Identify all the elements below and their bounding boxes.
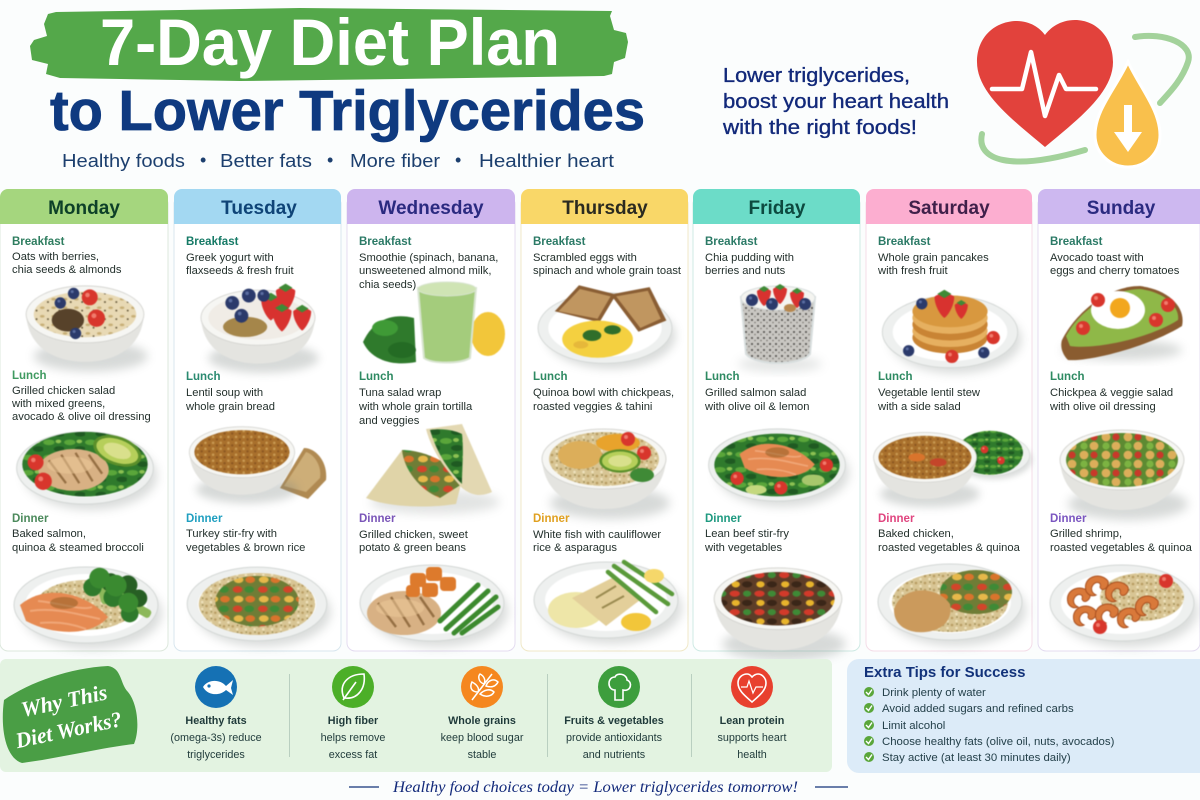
label: Whole grains (448, 715, 516, 727)
card (347, 196, 515, 651)
footer slogan: Healthy food choices today = Lower triglycerides tomorrow! (392, 779, 798, 796)
dinner text: potato & green beans (359, 542, 466, 554)
down arrow (1114, 105, 1142, 152)
icon: heart (731, 666, 773, 708)
pulse line (992, 52, 1096, 116)
panel: Saturday (866, 189, 1032, 651)
card (174, 196, 341, 651)
tagline (62, 150, 614, 171)
panel background (847, 659, 1200, 773)
lunch text: with mixed greens, (11, 398, 105, 410)
lunch text: with a side salad (877, 401, 961, 413)
lunch text: Lunch (12, 370, 46, 382)
tagline: • (455, 150, 461, 170)
benefit: whole grains (441, 666, 524, 761)
breakfast text: Breakfast (186, 236, 239, 248)
panel: extra tips (847, 659, 1200, 773)
dinner text: Dinner (359, 513, 396, 525)
tip: sugars: Avoid added sugars and refined carbs (882, 703, 1074, 715)
dish: turkey stir-fry (187, 567, 331, 647)
icon: leaf (332, 666, 374, 708)
benefit: lean protein (717, 666, 787, 761)
breakfast text: spinach and whole grain toast (533, 265, 682, 277)
dish: pancakes (882, 290, 1021, 373)
slogan: with the right foods! (722, 117, 917, 139)
benefit: high fiber (321, 666, 385, 761)
dinner text: Dinner (1050, 513, 1087, 525)
day name: Tuesday (221, 198, 297, 219)
panel background (0, 659, 832, 772)
breakfast text: Breakfast (12, 236, 65, 248)
tagline: Healthy foods (62, 151, 185, 171)
panel: why this diet works (0, 659, 832, 772)
breakfast text: Avocado toast with (1050, 252, 1144, 264)
breakfast text: Oats with berries, (12, 251, 99, 263)
dish: chicken sweet potato (360, 565, 508, 647)
dish: grilled shrimp (1050, 565, 1198, 647)
tagline: • (327, 150, 333, 170)
day name: Friday (748, 198, 806, 219)
card (1038, 196, 1200, 651)
lunch text: whole grain bread (185, 401, 275, 413)
dish: quinoa bowl (542, 429, 670, 519)
lunch text: Lunch (186, 371, 220, 383)
tip: active: Stay active (at least 30 minutes daily) (882, 752, 1071, 764)
icon: fish (195, 666, 237, 708)
lunch text: Lunch (878, 371, 912, 383)
panel: Tuesday (174, 189, 341, 651)
header (1038, 189, 1200, 224)
day name: Saturday (908, 198, 990, 219)
dinner text: Lean beef stir-fry (705, 528, 789, 540)
dinner text: roasted vegetables & quinoa (1050, 542, 1193, 554)
lunch text: Grilled chicken salad (12, 385, 115, 397)
label: keep blood sugar (441, 732, 524, 744)
card (521, 196, 688, 651)
dinner text: rice & asparagus (533, 542, 617, 554)
panel: Friday (693, 189, 860, 661)
green swoosh (981, 36, 1189, 161)
dinner text: Baked salmon, (12, 528, 86, 540)
label: supports heart (717, 732, 787, 744)
slogan: boost your heart health (723, 91, 949, 113)
lunch text: Lentil soup with (186, 387, 263, 399)
header (866, 189, 1032, 224)
dinner text: quinoa & steamed broccoli (12, 542, 144, 554)
panel: Sunday (1038, 189, 1200, 651)
panel: Monday (0, 189, 168, 651)
dinner text: White fish with cauliflower (533, 529, 661, 541)
tagline: Better fats (220, 151, 312, 171)
breakfast text: berries and nuts (705, 265, 786, 277)
breakfast text: chia seeds) (359, 279, 416, 291)
tip: fats: Choose healthy fats (olive oil, nuts, avocados) (882, 736, 1115, 748)
dinner text: Turkey stir-fry with (186, 528, 277, 540)
label: excess fat (329, 749, 377, 761)
dinner text: Dinner (12, 513, 49, 525)
dish: lentil stew and salad (874, 431, 1032, 507)
header (347, 189, 515, 224)
dish: avocado toast (1061, 286, 1183, 360)
lunch text: roasted veggies & tahini (533, 401, 652, 413)
dinner text: Dinner (705, 513, 742, 525)
lunch text: Chickpea & veggie salad (1050, 387, 1173, 399)
header (0, 189, 168, 224)
header (521, 189, 688, 224)
title block (30, 5, 645, 171)
lunch text: Lunch (705, 371, 740, 383)
label: Healthy fats (185, 715, 247, 727)
badge: Why This (19, 679, 109, 722)
lunch text: Grilled salmon salad (705, 387, 806, 399)
dish: eggs and toast (538, 285, 676, 369)
label: Lean protein (720, 715, 784, 727)
lunch text: Lunch (1050, 371, 1084, 383)
dish: chickpea salad (1060, 430, 1188, 520)
breakfast text: with fresh fruit (877, 265, 949, 277)
benefit: healthy fats (170, 666, 262, 761)
dinner text: with vegetables (704, 542, 783, 554)
dinner text: Dinner (533, 513, 570, 525)
header (174, 189, 341, 224)
label: triglycerides (187, 749, 245, 761)
dish: yogurt bowl (201, 284, 319, 373)
breakfast text: Whole grain pancakes (878, 252, 989, 264)
label: Fruits & vegetables (564, 715, 664, 727)
badge: Diet Works? (12, 706, 124, 753)
dinner text: Dinner (878, 513, 915, 525)
card (693, 196, 860, 651)
breakfast text: Breakfast (359, 236, 412, 248)
icon: grain (461, 666, 503, 708)
dish: green smoothie (363, 282, 505, 363)
lunch text: Lunch (359, 371, 394, 383)
breakfast text: unsweetened almond milk, (359, 265, 491, 277)
breakfast text: Breakfast (705, 236, 758, 248)
breakfast text: Smoothie (spinach, banana, (359, 252, 498, 264)
breakfast text: Greek yogurt with (186, 252, 274, 264)
tagline: More fiber (350, 151, 440, 171)
dish: beef stir-fry (714, 568, 846, 661)
breakfast text: Scrambled eggs with (533, 252, 637, 264)
label: helps remove (321, 732, 385, 744)
dish: salmon (14, 563, 162, 649)
icon: heart and triglyceride drop (977, 20, 1189, 167)
dish: lentil soup and bread (189, 427, 326, 503)
dinner text: roasted vegetables & quinoa (878, 542, 1021, 554)
tip: water: Drink plenty of water (882, 687, 986, 699)
card (0, 196, 168, 651)
lunch text: with whole grain tortilla (358, 401, 473, 413)
dinner text: Grilled shrimp, (1050, 528, 1122, 540)
day name: Monday (48, 198, 120, 219)
red heart (977, 20, 1113, 147)
benefit: fruits and vegetables (564, 666, 664, 761)
slogan: Lower triglycerides, (723, 65, 910, 87)
title line 1: 7-Day Diet Plan (100, 5, 560, 79)
label: health (737, 749, 767, 761)
lunch text: Tuna salad wrap (359, 387, 441, 399)
dinner text: Baked chicken, (878, 528, 954, 540)
breakfast text: Breakfast (878, 236, 931, 248)
lunch text: and veggies (359, 415, 420, 427)
title line 2: to Lower Triglycerides (50, 79, 645, 143)
dish: tuna wrap (366, 424, 500, 514)
green brush banner (30, 8, 628, 81)
dish: chia pudding (738, 284, 822, 372)
breakfast text: chia seeds & almonds (12, 264, 122, 276)
yellow drop (1095, 62, 1160, 167)
breakfast text: Chia pudding with (705, 252, 794, 264)
header (693, 189, 860, 224)
breakfast text: Breakfast (1050, 236, 1103, 248)
label: stable (468, 749, 496, 761)
dinner text: Dinner (186, 513, 223, 525)
breakfast text: flaxseeds & fresh fruit (186, 265, 294, 277)
label: and nutrients (583, 749, 646, 761)
label: (omega-3s) reduce (170, 732, 262, 744)
day name: Sunday (1087, 198, 1156, 219)
dish: salmon salad (709, 429, 849, 507)
lunch text: Vegetable lentil stew (878, 387, 981, 399)
day name: Thursday (562, 198, 648, 219)
label: High fiber (328, 715, 379, 727)
dinner text: vegetables & brown rice (186, 542, 305, 554)
lunch text: Quinoa bowl with chickpeas, (533, 387, 674, 399)
tip: alcohol: Limit alcohol (882, 720, 945, 732)
breakfast text: Breakfast (533, 236, 586, 248)
panel: Thursday (521, 189, 688, 651)
tips heading: Extra Tips for Success (864, 664, 1025, 681)
day name: Wednesday (378, 198, 484, 219)
dish: white fish (534, 562, 682, 644)
badge (3, 666, 137, 763)
panel: Wednesday (347, 189, 515, 651)
icon: broccoli (598, 666, 640, 708)
dish: chicken salad (17, 429, 157, 510)
lunch text: avocado & olive oil dressing (12, 411, 151, 423)
breakfast text: eggs and cherry tomatoes (1050, 265, 1180, 277)
dish: oat bowl (26, 286, 148, 371)
lunch text: Lunch (533, 371, 568, 383)
dinner text: Grilled chicken, sweet (359, 529, 469, 541)
card (866, 196, 1032, 651)
tagline: Healthier heart (479, 151, 614, 171)
lunch text: with olive oil dressing (1049, 401, 1156, 413)
dish: baked chicken (878, 564, 1026, 646)
label: provide antioxidants (566, 732, 663, 744)
tagline: • (200, 150, 206, 170)
lunch text: with olive oil & lemon (704, 401, 809, 413)
